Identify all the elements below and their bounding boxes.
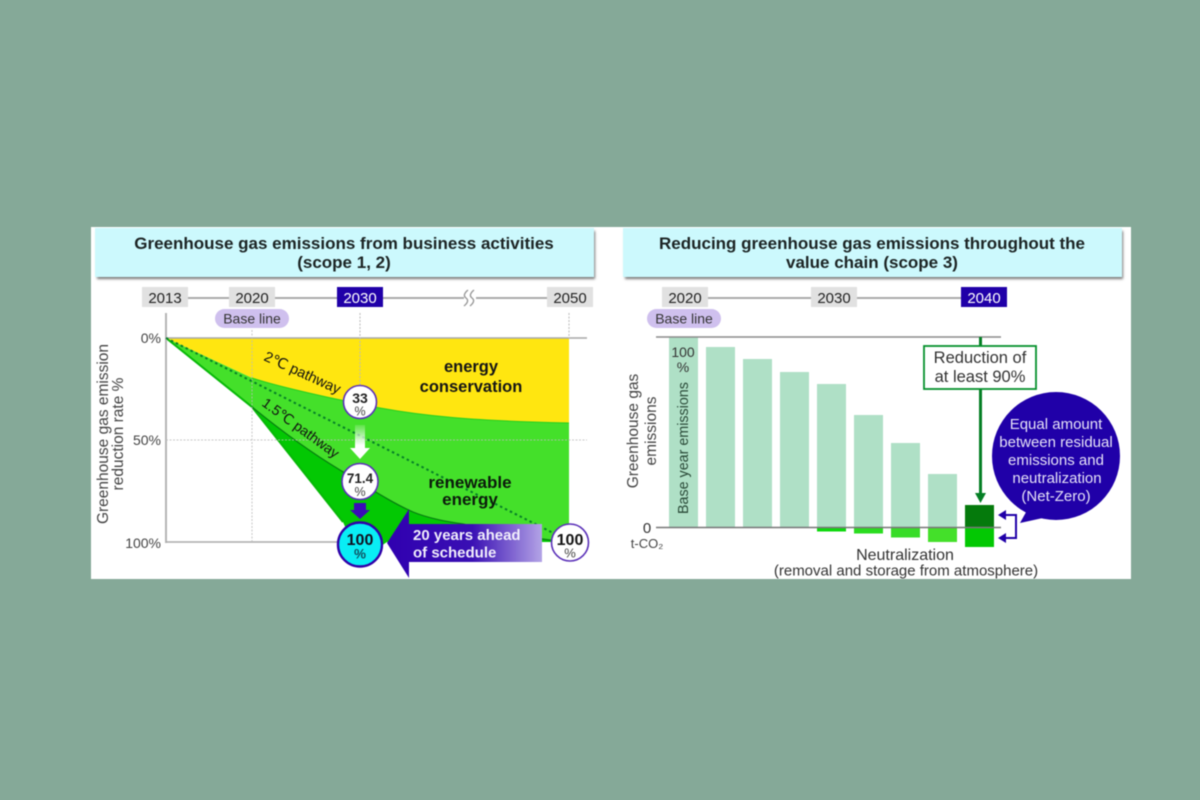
white panel: [91, 227, 1131, 579]
label: base line: [647, 309, 721, 328]
y-axis title: Greenhouse gas: [625, 373, 642, 488]
label: base line: Base line: [223, 310, 281, 326]
timeline: scope 3: 2030: [817, 290, 851, 307]
y-axis labels: 0%: [141, 330, 161, 346]
y-axis title: Greenhouse gas emission: [95, 344, 112, 524]
heading: scope 3: value chain (scope 3): [786, 253, 958, 272]
marker: 100 percent in 2050: [552, 524, 588, 561]
marker: 33 percent: 33: [352, 390, 368, 406]
label: base line: Base line: [655, 310, 713, 326]
callout arrow: 20 years ahead: [387, 509, 542, 578]
timeline: scope 1, 2: 2030: [343, 290, 377, 307]
callout arrow: 20 years ahead: of schedule: [413, 544, 496, 562]
label: 100 percent: 100: [671, 344, 695, 360]
axis label: zero: 0: [643, 520, 651, 537]
panel: scope 1, 2: [95, 228, 595, 578]
marker: 100 percent in 2050: %: [564, 546, 576, 560]
arrow: purple down arrow: [350, 503, 370, 519]
chart: emission pathways: [125, 313, 587, 560]
callout arrow: 20 years ahead: 20 years ahead: [413, 527, 521, 544]
callout: reduction of at least 90%: [924, 346, 1036, 389]
label: energy conservation: energy: [444, 358, 499, 376]
arrow: white down arrow: [350, 425, 370, 459]
arrow: reduction down arrow: [975, 337, 986, 503]
timeline: scope 1, 2: 2013: [148, 290, 182, 307]
marker: 100 percent in 2050: 100: [557, 532, 583, 549]
label: neutralization: (removal and storage from atmosphere): [774, 562, 1038, 580]
callout: reduction of at least 90%: at least 90%: [935, 368, 1026, 386]
y-axis title second line: emissions: [643, 396, 660, 465]
callout: net-zero: [992, 392, 1120, 523]
bar chart: emissions and neutralization: [631, 337, 1001, 551]
callout: net-zero: (Net-Zero): [1021, 488, 1091, 505]
y-axis labels: 100%: [125, 535, 161, 551]
y-axis labels: 50%: [133, 432, 161, 448]
timeline: scope 3: 2020: [668, 290, 702, 307]
callout: reduction of at least 90%: Reduction of: [934, 349, 1027, 367]
marker: 71.4 percent: 71.4: [347, 471, 374, 486]
marker: 100 percent in 2030: %: [354, 546, 366, 562]
heading: scope 1, 2: (scope 1, 2): [297, 253, 391, 272]
heading: scope 3: Reducing greenhouse gas emissions throughout the: [659, 234, 1085, 253]
label: 1.5 degree pathway: 1.5℃ pathway: [259, 394, 342, 461]
y-axis labels: [125, 330, 161, 551]
arrow: net-zero bracket: [998, 510, 1016, 543]
heading: scope 3: [623, 228, 1123, 279]
marker: 33 percent: [344, 386, 376, 418]
label: base line: [215, 309, 289, 328]
timeline: scope 1, 2: [142, 287, 593, 307]
timeline: scope 1, 2: 2050: [553, 290, 587, 307]
marker: 33 percent: %: [354, 404, 366, 418]
marker: 71.4 percent: [342, 464, 378, 500]
marker: 71.4 percent: %: [354, 485, 366, 499]
label: renewable energy: renewable: [428, 473, 512, 492]
label: renewable energy: energy: [442, 490, 498, 509]
callout: net-zero: between residual: [999, 434, 1113, 451]
label: 100 percent: %: [677, 359, 689, 375]
label: energy conservation: conservation: [420, 378, 522, 396]
timeline: scope 3: [662, 287, 1007, 307]
y-axis title second line: reduction rate %: [110, 377, 127, 490]
label: neutralization: Neutralization: [856, 547, 954, 564]
timeline: scope 3: 2040: [967, 290, 1001, 307]
panel: scope 3: [623, 228, 1123, 580]
callout: net-zero: Equal amount: [1010, 416, 1103, 433]
marker: 100 percent in 2030: [338, 522, 382, 566]
label: 2 degree pathway: 2℃ pathway: [261, 349, 344, 398]
marker: 100 percent in 2030: 100: [347, 532, 373, 549]
timeline: scope 1, 2: 2020: [235, 290, 269, 307]
callout: net-zero: neutralization: [1012, 470, 1102, 487]
label: base year emissions: Base year emissions: [676, 382, 692, 514]
callout: net-zero: emissions and: [1008, 452, 1104, 469]
heading: scope 1, 2: [95, 228, 595, 279]
heading: scope 1, 2: Greenhouse gas emissions from business activities: [134, 234, 554, 253]
axis label: t-CO2: t-CO₂: [631, 536, 663, 551]
